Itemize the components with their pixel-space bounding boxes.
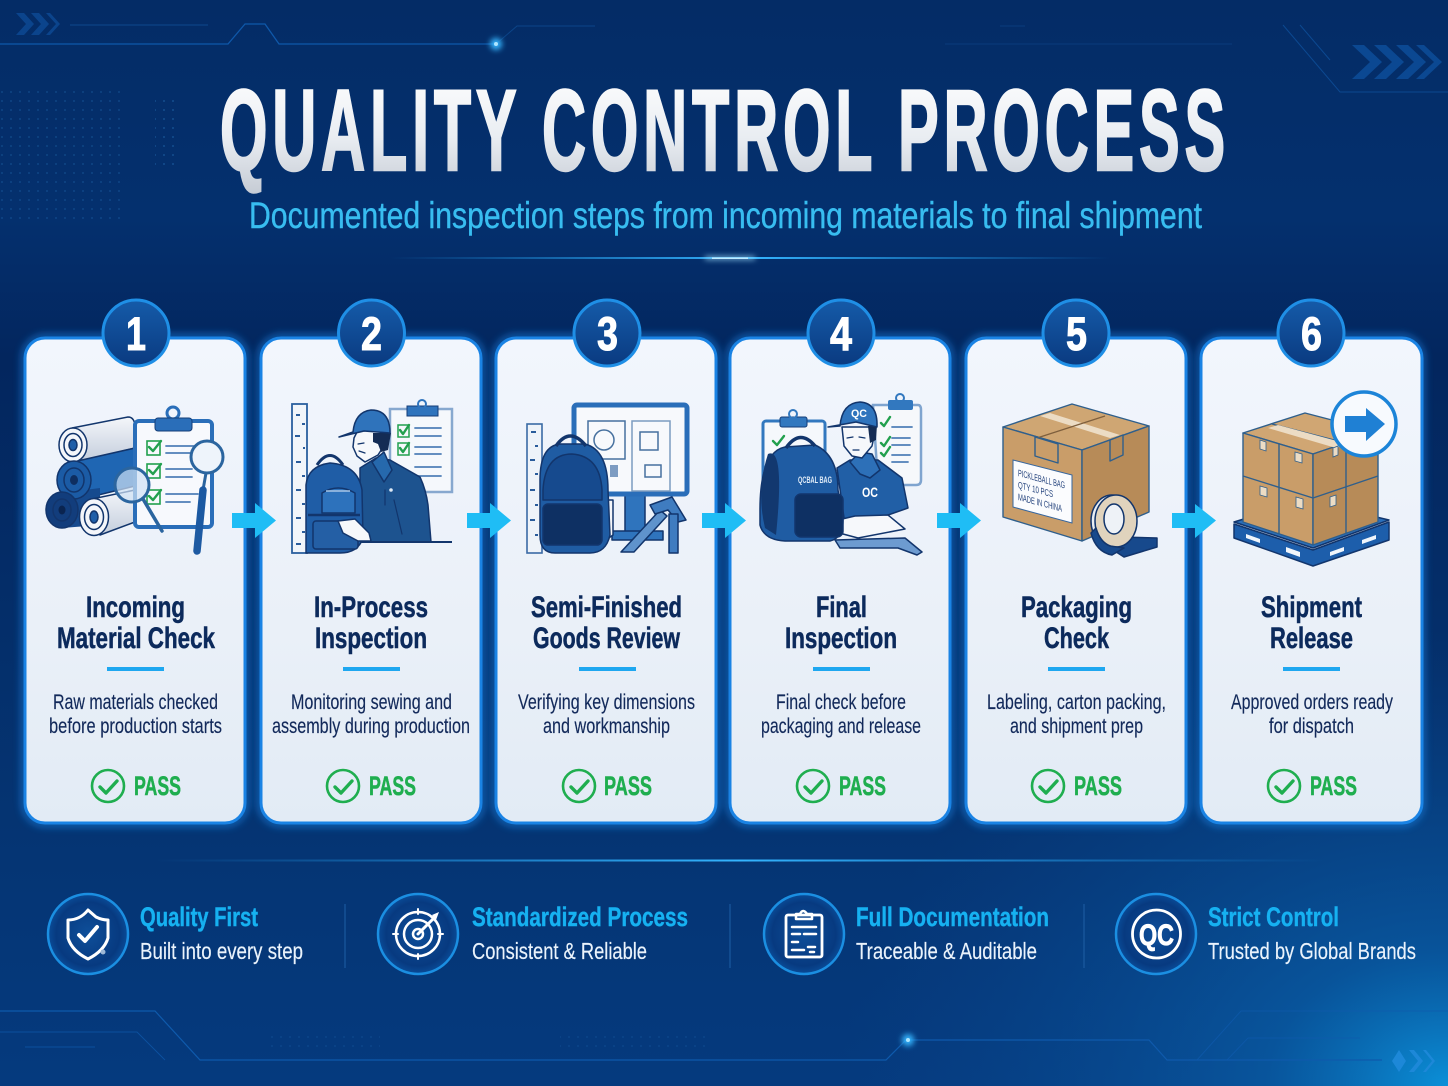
pass badge bbox=[327, 770, 416, 802]
icon: taped carton with label: MADE IN CHINA bbox=[1018, 492, 1062, 515]
step 4 description bbox=[761, 691, 921, 738]
pass badge bbox=[563, 770, 652, 802]
step 6 heading: Release bbox=[1270, 622, 1353, 655]
step 1 description bbox=[49, 691, 222, 738]
footer: Standardized Process: Standardized Process bbox=[472, 902, 688, 932]
panel: step 4 bbox=[729, 300, 951, 824]
step number 4: 4 bbox=[830, 307, 852, 360]
panel: step 3 bbox=[495, 300, 717, 824]
footer: Standardized Process bbox=[378, 894, 688, 974]
step 5 heading bbox=[1021, 591, 1132, 655]
badge: arrow bbox=[1332, 392, 1396, 456]
footer: Quality First: Built into every step bbox=[140, 938, 303, 964]
step 6 description: for dispatch bbox=[1269, 715, 1354, 738]
footer: Quality First bbox=[48, 894, 303, 974]
panel: step 1 bbox=[24, 300, 246, 824]
step 2 description bbox=[272, 691, 470, 738]
step number 6: 6 bbox=[1301, 307, 1322, 360]
step 6 heading: Shipment bbox=[1261, 591, 1362, 624]
pass badge: PASS bbox=[604, 771, 652, 801]
pass badge: PASS bbox=[1074, 771, 1122, 801]
icon: fabric rolls and clipboard bbox=[46, 407, 223, 551]
step 4 heading bbox=[785, 591, 897, 655]
step number 1: 1 bbox=[126, 307, 146, 360]
step 5 description: and shipment prep bbox=[1010, 715, 1143, 738]
pass badge: PASS bbox=[134, 771, 181, 801]
footer: Strict Control bbox=[1116, 894, 1416, 974]
footer: Quality First: Quality First bbox=[140, 902, 258, 932]
step number 2: 2 bbox=[361, 307, 382, 360]
step 3 heading bbox=[531, 591, 682, 655]
step number 4 bbox=[808, 300, 874, 366]
footer: Full Documentation: Full Documentation bbox=[856, 902, 1049, 932]
icon: taped carton with label: QTY 10 PCS bbox=[1018, 480, 1053, 500]
pass badge bbox=[92, 770, 181, 802]
step number 3: 3 bbox=[597, 307, 618, 360]
arrow 3 to 4 bbox=[702, 503, 746, 538]
step 4 description: packaging and release bbox=[761, 715, 921, 738]
step 1 description: Raw materials checked bbox=[53, 691, 218, 714]
step 3 description bbox=[518, 691, 695, 738]
icon: shield bbox=[48, 894, 128, 974]
icon: final inspector with backpack: QCBAL BAG bbox=[798, 475, 832, 485]
pass badge bbox=[1268, 770, 1357, 802]
step 2 description: Monitoring sewing and bbox=[291, 691, 452, 714]
icon: backpack with spec monitor bbox=[527, 405, 687, 553]
pass badge: PASS bbox=[369, 771, 416, 801]
icon: final inspector with backpack bbox=[760, 394, 922, 555]
step 3 description: Verifying key dimensions bbox=[518, 691, 695, 714]
arrows between steps bbox=[232, 503, 1216, 538]
step number 3 bbox=[574, 300, 640, 366]
arrow 2 to 3 bbox=[467, 503, 511, 538]
step number 5: 5 bbox=[1066, 307, 1087, 360]
step 5 description: Labeling, carton packing, bbox=[987, 691, 1166, 714]
panel: step 5 bbox=[965, 300, 1187, 824]
arrow 1 to 2 bbox=[232, 503, 276, 538]
footer: Strict Control: Strict Control bbox=[1208, 902, 1339, 932]
subtitle: Documented inspection steps from incoming materials to final shipment bbox=[249, 195, 1203, 236]
step number 6 bbox=[1278, 300, 1344, 366]
icon: inspector measuring backpack bbox=[292, 400, 452, 553]
step 1 heading: Material Check bbox=[57, 622, 215, 655]
step 6 heading bbox=[1261, 591, 1362, 655]
footer: Standardized Process: Consistent & Reliable bbox=[472, 938, 647, 964]
step 1 description: before production starts bbox=[49, 715, 222, 738]
step 6 description: Approved orders ready bbox=[1231, 691, 1393, 714]
step 4 heading: Inspection bbox=[785, 622, 897, 655]
icon: QC seal: QC bbox=[1139, 919, 1174, 952]
icon: taped carton with label bbox=[1003, 404, 1157, 557]
step 5 description bbox=[987, 691, 1166, 738]
step 1 heading: Incoming bbox=[86, 591, 185, 624]
step 2 heading: Inspection bbox=[315, 622, 427, 655]
footer: Full Documentation: Traceable & Auditable bbox=[856, 938, 1037, 964]
step number 1 bbox=[103, 300, 169, 366]
step 3 heading: Semi-Finished bbox=[531, 591, 682, 624]
step 4 heading: Final bbox=[816, 591, 867, 624]
pass badge: PASS bbox=[1310, 771, 1357, 801]
icon: final inspector with backpack: OC bbox=[862, 484, 878, 500]
icon: QC seal bbox=[1116, 894, 1196, 974]
icon: final inspector with backpack: QC bbox=[851, 408, 867, 420]
step 5 heading: Packaging bbox=[1021, 591, 1132, 624]
footer: Full Documentation bbox=[764, 894, 1049, 974]
step number 5 bbox=[1043, 300, 1109, 366]
icon: taped carton with label: PICKLEBALL BAG bbox=[1018, 468, 1065, 492]
step 6 description bbox=[1231, 691, 1393, 738]
step 5 heading: Check bbox=[1044, 622, 1109, 655]
arrow 4 to 5 bbox=[937, 503, 981, 538]
step 3 description: and workmanship bbox=[543, 715, 670, 738]
step 2 heading bbox=[314, 591, 428, 655]
pass badge bbox=[1032, 770, 1122, 802]
pass badge: PASS bbox=[839, 771, 886, 801]
step number 2 bbox=[338, 300, 404, 366]
arrow 5 to 6 bbox=[1172, 504, 1216, 538]
panel: step 2 bbox=[260, 300, 482, 824]
step 3 heading: Goods Review bbox=[533, 622, 680, 655]
step 4 description: Final check before bbox=[776, 691, 906, 714]
icon: target bbox=[378, 894, 458, 974]
pass badge bbox=[797, 770, 886, 802]
icon: clipboard bbox=[764, 894, 844, 974]
step 2 description: assembly during production bbox=[272, 715, 470, 738]
panel: step 6 bbox=[1200, 300, 1422, 824]
step 1 heading bbox=[57, 591, 215, 655]
step 2 heading: In-Process bbox=[314, 591, 428, 624]
icon: palletised cartons bbox=[1234, 392, 1396, 566]
